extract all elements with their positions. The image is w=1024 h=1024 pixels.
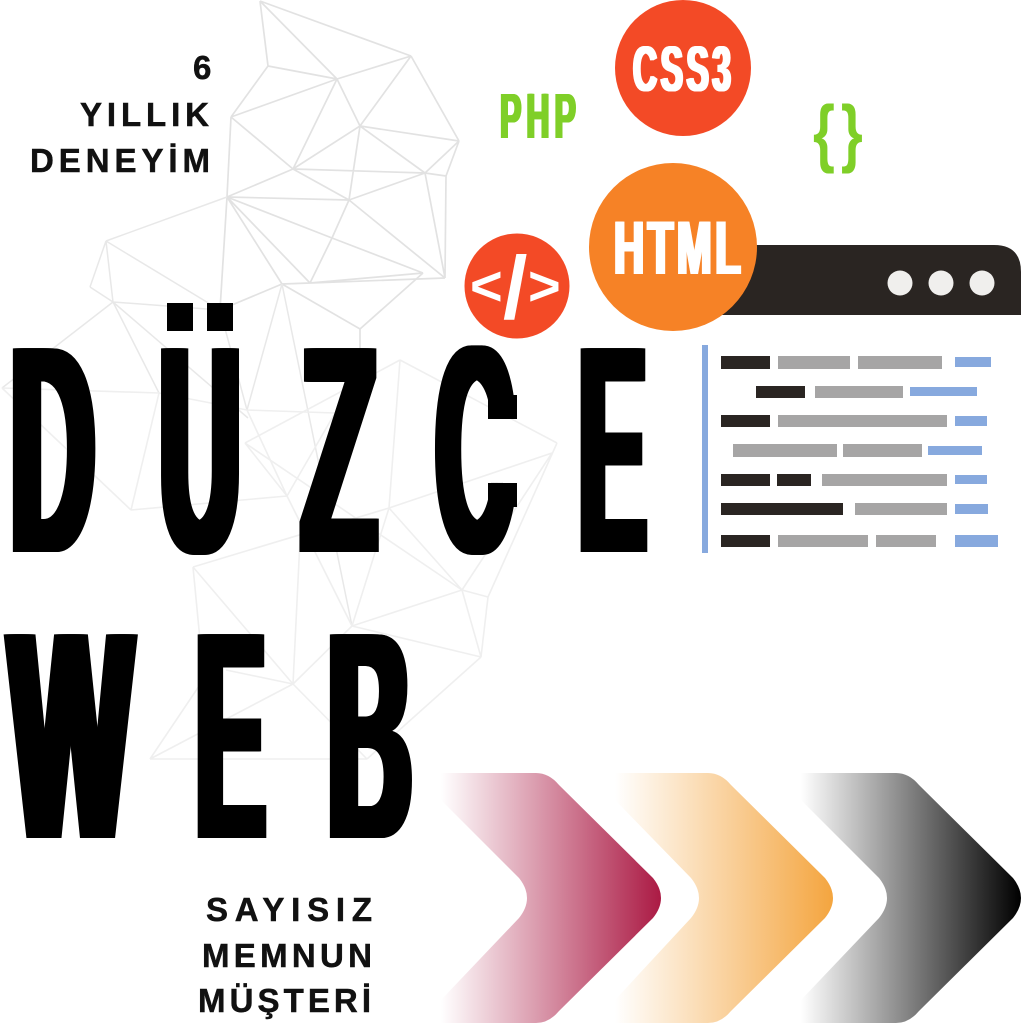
badge: HTML [589, 163, 757, 331]
text: sayısız memnun müşteri: MÜŞTERİ [198, 982, 371, 1019]
letter Z: Z [302, 284, 376, 615]
C lower arm end [488, 483, 517, 507]
icon: curly braces: {} [813, 90, 869, 174]
badge text: HTML: HTML [614, 206, 744, 291]
margin bar [702, 345, 708, 553]
letter C: C [436, 284, 513, 615]
letter B: B [328, 570, 411, 901]
lower network mesh [2, 360, 557, 759]
code window: title bar [700, 245, 1021, 315]
Ü right dot [207, 303, 233, 331]
dark code segments [721, 356, 843, 547]
chevron arrow: crimson [441, 773, 661, 1023]
badge: CSS3 [615, 0, 751, 136]
text: 6 yıllık deneyim: 6 [193, 49, 211, 86]
label: PHP: PHP [500, 80, 581, 152]
window dots [888, 270, 994, 296]
letter E: E [196, 570, 265, 901]
text: sayısız memnun müşteri: SAYISIZ [206, 891, 372, 928]
chevron arrow: black [801, 773, 1021, 1023]
badge: code tag: < [470, 254, 503, 317]
badge: code tag [464, 234, 570, 338]
letter D: D [10, 284, 94, 615]
chevron arrow: orange [615, 773, 833, 1023]
title: DÜZCE [10, 284, 648, 615]
text: 6 yıllık deneyim: YILLIK [80, 96, 209, 133]
gray code segments [733, 356, 947, 547]
badge: code tag: / [503, 238, 527, 337]
text: 6 yıllık deneyim: DENEYİM [30, 142, 210, 179]
letter E: E [579, 284, 646, 615]
Ü left dot [167, 303, 193, 331]
blue code segments [910, 357, 998, 547]
letter Ü: Ü [160, 284, 240, 615]
code lines panel [702, 345, 998, 553]
badge: code tag: > [528, 254, 561, 317]
upper network mesh [220, 1, 459, 348]
text: 6 yıllık deneyim [30, 49, 211, 179]
C upper arm end [488, 395, 517, 419]
left network mesh [2, 197, 352, 626]
letter W: W [10, 570, 132, 901]
text: sayısız memnun müşteri [198, 891, 372, 1019]
text: sayısız memnun müşteri: MEMNUN [202, 937, 372, 974]
badge text: CSS3: CSS3 [633, 33, 734, 105]
title: WEB [4, 570, 412, 901]
